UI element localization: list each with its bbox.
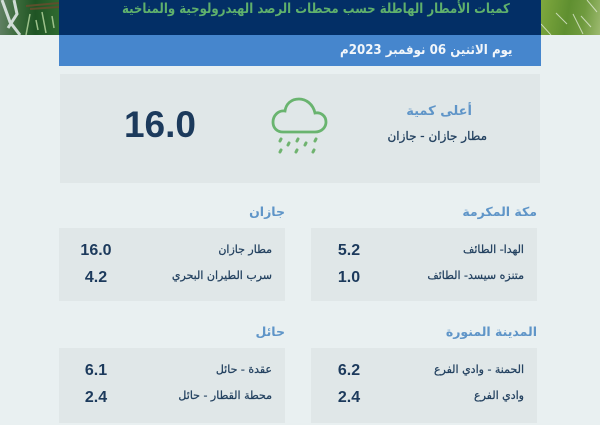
value: Al Hamnah: 6.2 [338,362,360,379]
value: Al Hada: 5.2 [338,242,360,259]
value: train station: 2.4 [85,389,107,406]
heading: Jazan: جازان [249,204,285,219]
icon: rain cloud [272,98,328,154]
label: Uqdah: عقدة - حائل [216,363,272,376]
panel: highest amount [60,74,540,183]
date: يوم الاثنين 06 نوفمبر 2023م [340,43,512,58]
label: train station: محطة القطار - حائل [178,389,272,402]
heading: Makkah: مكة المكرمة [462,204,537,219]
label: Al Hada: الهدا- الطائف [463,243,524,256]
header band [59,0,541,35]
value: Wadi Al Fara: 2.4 [338,389,360,406]
label: Wadi Al Fara: وادي الفرع [474,389,524,402]
label: Jazan airport: مطار جازان [218,243,272,256]
value: Saisad: 1.0 [338,269,360,286]
panel: Hail [59,348,285,423]
value: Jazan airport: 16.0 [80,242,112,259]
panel: Makkah [311,228,537,301]
label: Al Hamnah: الحمنة - وادي الفرع [434,363,524,376]
panel: Jazan [59,228,285,301]
heading: Madinah: المدينة المنورة [446,324,537,339]
value: naval aviation: 4.2 [85,269,107,286]
value: Uqdah: 6.1 [85,362,107,379]
label: Saisad: متنزه سيسد- الطائف [427,269,524,282]
heading: Hail: حائل [255,324,285,339]
photo: left foliage [0,0,59,35]
highest amount station: مطار جازان - جازان [387,129,487,143]
title: كميات الأمطار الهاطلة حسب محطات الرصد الهيدرولوجية والمناخية [122,1,510,17]
label: naval aviation: سرب الطيران البحري [172,269,272,282]
photo: right green rain [541,0,600,35]
date bar [59,35,541,66]
highest amount label: أعلى كمية [406,104,472,119]
highest amount value: 16.0 [124,104,196,145]
panel: Madinah [311,348,537,423]
